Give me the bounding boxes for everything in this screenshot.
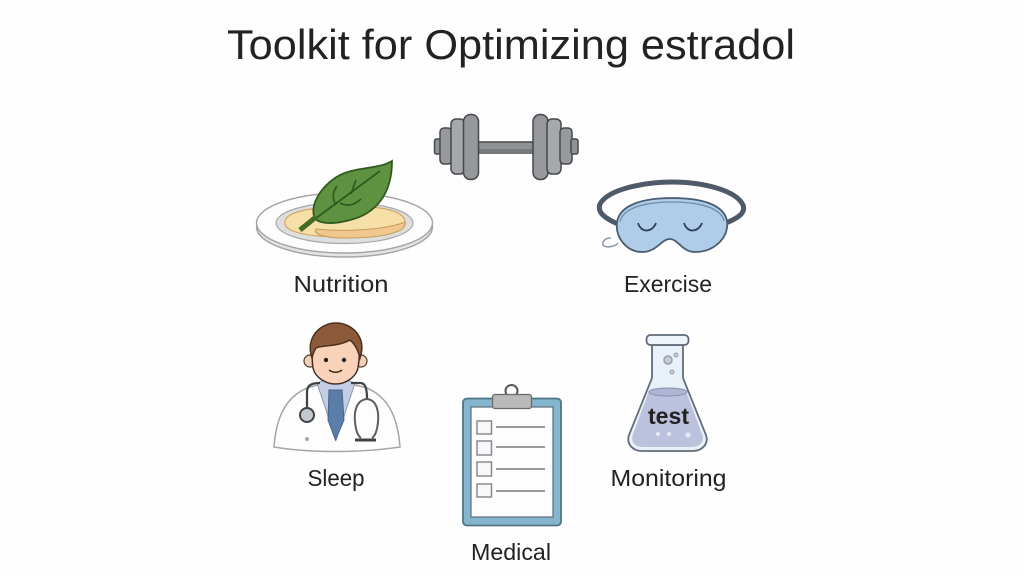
title: Toolkit for Optimizing estradol — [227, 21, 795, 68]
label: Medical: Medical — [471, 539, 551, 565]
flask label: test: test — [648, 403, 689, 429]
icon: clipboard — [463, 385, 561, 526]
label: Nutrition: Nutrition — [294, 271, 388, 297]
label: Sleep: Sleep — [308, 465, 364, 491]
label: Exercise: Exercise — [624, 271, 712, 297]
icon: flask — [628, 335, 707, 451]
icon: dumbbell — [434, 114, 578, 180]
icon: doctor — [274, 323, 400, 452]
icon: plate with leaf — [256, 161, 432, 257]
icon: sleep mask — [599, 182, 744, 252]
label: Monitoring: Monitoring — [610, 465, 726, 491]
